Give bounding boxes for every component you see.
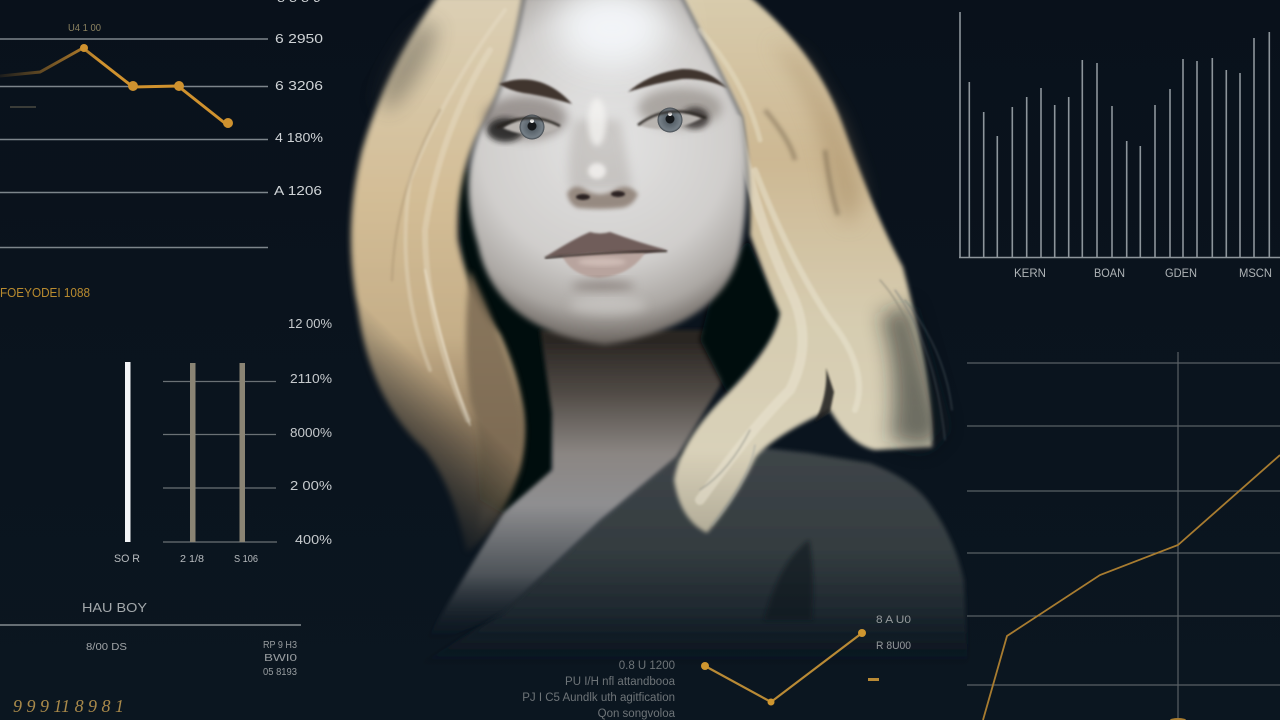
nose (567, 98, 638, 209)
right hair strands (700, 30, 952, 525)
right eye socket shading (638, 88, 722, 128)
line chart: top left (0, 23, 323, 248)
white bar (125, 362, 130, 542)
data points (701, 629, 866, 706)
line chart: bottom right (967, 352, 1280, 720)
face (468, 0, 747, 345)
dark area between jaw and right hair (700, 240, 782, 395)
bottom marker (1170, 718, 1186, 720)
axis labels: 2110% (290, 371, 332, 386)
left hair, fading into the background (351, 0, 524, 553)
axis labels: 2 00% (290, 478, 332, 493)
gold footer figures: 9 9 9 11 8 9 8 1 (13, 696, 124, 716)
caption text: 0.8 U 1200 (619, 660, 675, 672)
brown lower left hair (463, 270, 526, 462)
right eyebrow (628, 69, 727, 92)
bars (960, 12, 1269, 257)
orange trend line (983, 455, 1280, 720)
caption text: Qon songvoloa (598, 708, 676, 720)
legend labels: R 8U00 (876, 640, 911, 652)
neck and chest (420, 330, 735, 650)
data points (80, 44, 233, 128)
bar labels: SO R (114, 553, 140, 565)
axis labels: 400% (295, 532, 332, 547)
forehead highlight (554, 0, 670, 70)
notch under right hair (815, 368, 834, 422)
legend labels (876, 614, 911, 652)
bar chart: top right (959, 12, 1280, 280)
gridlines (163, 382, 277, 542)
legend dash (868, 678, 879, 681)
left hair mass (351, 0, 524, 553)
category labels: BOAN (1094, 266, 1125, 280)
axis labels: A 1206 (274, 183, 322, 198)
caption text: PJ I C5 Aundlk uth agitfication (522, 692, 675, 704)
garment (410, 448, 968, 670)
table right cell (263, 640, 298, 678)
chart label: U4 1 00 (68, 23, 101, 34)
category labels: MSCN (1239, 266, 1272, 280)
left eyebrow (499, 79, 572, 104)
right hair outer shading (880, 305, 945, 450)
caption text: PU I/H nfl attandbooa (565, 676, 676, 688)
table right cell: BWI0 (264, 653, 298, 664)
table right cell: 05 8193 (263, 667, 297, 678)
axis labels (274, 31, 323, 198)
left eye socket shading (483, 96, 567, 140)
axis labels: 4 180% (275, 130, 323, 145)
axis labels: 6 2950 (275, 31, 323, 46)
orange line (705, 633, 862, 702)
axis labels: 12 00% (288, 316, 332, 331)
right hair dark strand (765, 110, 838, 215)
bar labels: S 106 (234, 554, 258, 565)
caption text (522, 660, 676, 720)
vertical marker (1177, 352, 1179, 720)
table heading: HAU BOY (82, 600, 147, 615)
left hair strands (392, 10, 505, 425)
axis labels: 8000% (290, 425, 332, 440)
orange section heading: FOEYODEI 1088 (0, 286, 90, 300)
category labels: KERN (1014, 266, 1046, 280)
dark shadow behind neck and left jaw (455, 170, 560, 515)
left hair top shading (371, 15, 445, 115)
orange trend line (0, 48, 226, 124)
left eye (487, 114, 562, 142)
baseline (959, 256, 1280, 258)
bar labels (114, 553, 258, 565)
small dash marker (10, 106, 36, 108)
legend labels: 8 A U0 (876, 614, 911, 626)
axis labels (288, 316, 332, 547)
chin highlight (570, 296, 646, 314)
bar labels: 2 1/8 (180, 554, 204, 565)
category labels (1014, 266, 1272, 280)
bar chart: left middle (114, 316, 332, 565)
right eye (638, 107, 709, 132)
line chart: bottom centre (701, 614, 911, 706)
gridlines (0, 39, 268, 248)
portrait of woman (351, 0, 968, 670)
garment fold (764, 540, 813, 620)
right hair mass (674, 0, 932, 533)
axis labels: 6 3206 (275, 78, 323, 93)
lips (545, 232, 667, 292)
table cell: 8/00 DS (86, 642, 127, 653)
table right cell: RP 9 H3 (263, 640, 297, 651)
tan bars (190, 363, 196, 542)
category labels: GDEN (1165, 266, 1197, 280)
table: bottom left (0, 600, 301, 678)
gridlines (967, 363, 1280, 685)
right hair brown upper streak (770, 40, 862, 225)
